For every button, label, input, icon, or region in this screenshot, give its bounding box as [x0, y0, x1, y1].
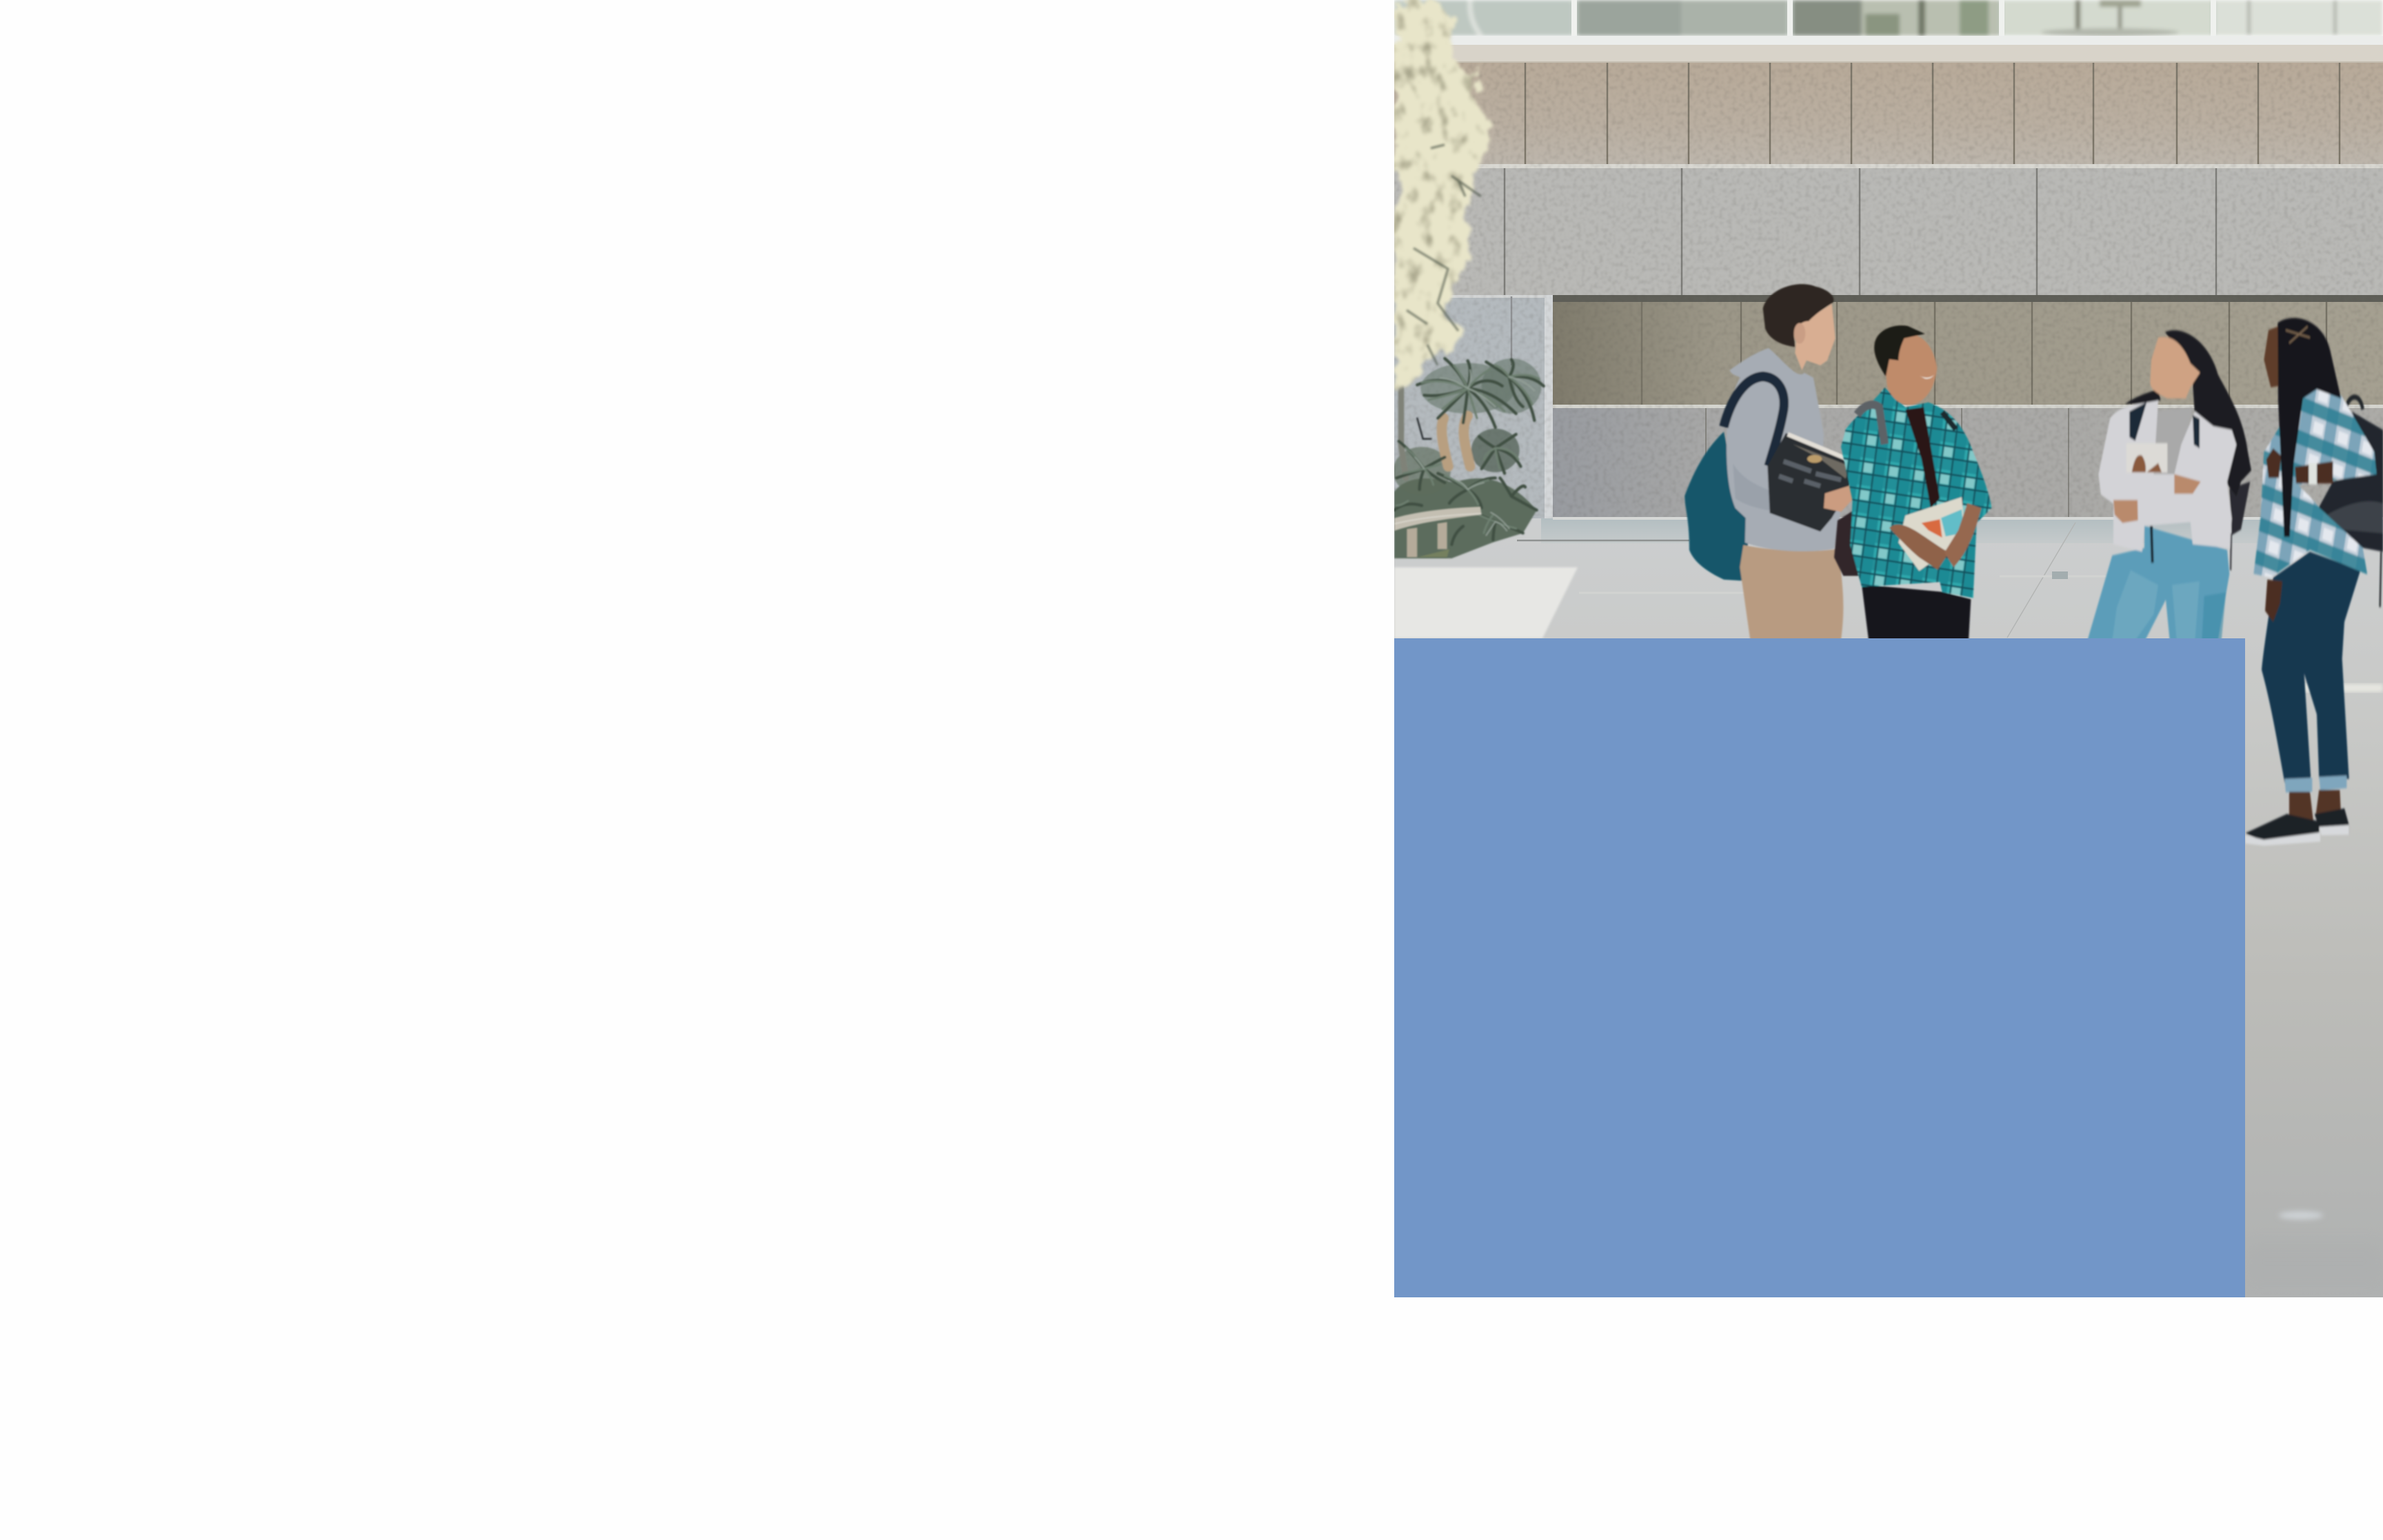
grey hoodie [1727, 348, 1840, 551]
backpack strap [1724, 376, 1784, 466]
short dark hair [1874, 325, 1925, 376]
sunlit patch on the floor [1394, 567, 1578, 638]
book [2126, 443, 2167, 473]
roof ledge and soffit [1394, 36, 2383, 63]
face [2264, 327, 2282, 387]
navy straps [2129, 402, 2200, 448]
student 1: man in grey hoodie with teal backpack [1685, 284, 1855, 640]
concrete column at left [1394, 295, 1553, 526]
neck and face [1795, 304, 1836, 370]
grey backpack straps [1857, 405, 1884, 444]
student 4: woman with braids, blue plaid shirt and dark jeans [2245, 318, 2383, 846]
blue panel [1394, 638, 2245, 1297]
plaid shirt [2253, 376, 2377, 578]
middle grey wall panels [1394, 168, 2383, 295]
shoes [2315, 809, 2349, 834]
small black bag [2229, 482, 2250, 535]
backpack [1685, 432, 1751, 580]
fist [2266, 448, 2281, 478]
long dark hair [2125, 330, 2251, 496]
paved floor [1394, 517, 2383, 1297]
dark t-shirt [1905, 407, 1940, 508]
black leather backpack [2346, 397, 2363, 409]
bright streak on the floor [2300, 684, 2383, 692]
face [1884, 335, 1937, 405]
hand at side [2265, 580, 2282, 622]
books [1898, 497, 1965, 571]
plaid shirt [1841, 387, 1991, 598]
hair [1763, 284, 1833, 347]
crossed arms and hands [2174, 474, 2201, 494]
black trousers [1862, 585, 1971, 640]
forearms and clasped hands [1889, 525, 1949, 569]
pale reflection on the floor [2279, 1211, 2323, 1219]
window mullions [1574, 0, 2213, 36]
grey tee [2153, 407, 2193, 474]
student 3: woman in white zip hoodie and blue jeans [2087, 330, 2251, 640]
recessed lower wall [1552, 295, 2383, 518]
student 2: man in teal plaid shirt holding a book [1834, 325, 1991, 640]
dark bag behind [1834, 508, 1860, 576]
hand holding the book [1824, 485, 1853, 511]
forearm and bracelets [2295, 461, 2333, 483]
tree foliage at left [1394, 0, 1493, 389]
long braids [2278, 318, 2341, 537]
jeans [2087, 526, 2229, 640]
upper tan wall panels [1394, 63, 2383, 168]
window band along the top of the building [1394, 0, 2383, 37]
face [2150, 337, 2200, 398]
cuffs [2284, 776, 2346, 793]
dark stems inside the tree [1407, 145, 1481, 365]
granite grain texture [1394, 63, 2383, 518]
ankles [2289, 790, 2341, 825]
book with a wolf-eye cover [1767, 433, 1855, 531]
white hoodie [2098, 401, 2236, 551]
wooden bench [1394, 507, 1482, 557]
khaki trousers [1740, 545, 1843, 640]
photo: four students talking in front of a campus building [1394, 0, 2383, 1297]
dark jeans [2262, 551, 2360, 782]
palm-like plants in front of the column [1393, 358, 1544, 558]
